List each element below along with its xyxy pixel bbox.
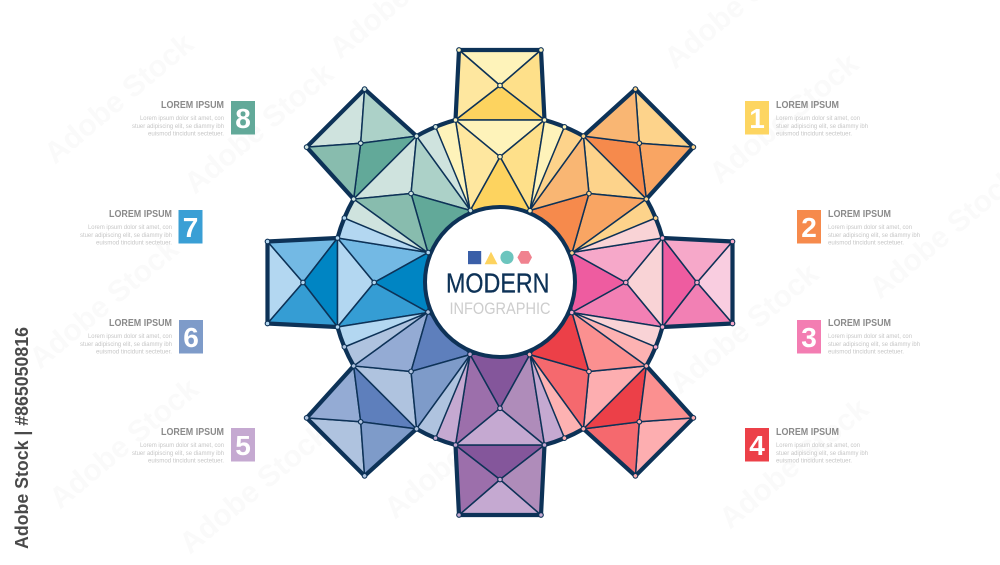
body text 4: euismod tincidunt sectetuer. <box>776 458 852 464</box>
gear outline <box>268 50 732 515</box>
section 3: pink <box>572 218 732 347</box>
section 6 body <box>339 288 495 443</box>
body text 5: euismod tincidunt sectetuer. <box>148 458 224 464</box>
number badge 7: 7 <box>183 212 198 243</box>
number badge 8: 8 <box>235 103 251 134</box>
heading 3: LOREM IPSUM <box>828 318 891 329</box>
body text 8: Lorem ipsum dolor sit amet, con <box>140 115 224 122</box>
body text 7: euismod tincidunt sectetuer. <box>96 240 172 246</box>
section 7 tooth <box>268 238 338 327</box>
item 5 <box>132 427 255 464</box>
number badge 1: 1 <box>749 103 765 134</box>
body text 4: Lorem ipsum dolor sit amet, con <box>776 442 860 449</box>
section 8 body <box>339 122 495 277</box>
section 1: yellow <box>436 50 564 211</box>
body text 1: Lorem ipsum dolor sit amet, con <box>776 115 860 122</box>
body text 7: Lorem ipsum dolor sit amet, con <box>88 224 172 231</box>
center subtitle: INFOGRAPHIC <box>450 299 550 318</box>
node dots <box>265 48 735 517</box>
section 4 body <box>505 288 661 443</box>
body text 6 <box>80 333 172 356</box>
heading 5: LOREM IPSUM <box>161 427 224 438</box>
body text 5 <box>132 442 224 464</box>
number badge 2: 2 <box>801 212 817 243</box>
body text 2: stuer adipiscing elit, se diammy ibh <box>828 232 920 239</box>
item 8 <box>132 100 255 138</box>
item 6 <box>80 318 203 356</box>
number badge 6: 6 <box>183 322 199 353</box>
body text 3: Lorem ipsum dolor sit amet, con <box>828 333 912 340</box>
body text 8: euismod tincidunt sectetuer. <box>148 130 224 138</box>
center title: MODERN <box>446 267 550 298</box>
section 2 body <box>505 122 661 277</box>
section 5 body <box>436 354 564 445</box>
watermark pattern: Adobe Stock <box>173 417 335 560</box>
section 6: slate blue <box>290 288 495 493</box>
stock credit: Adobe Stock | #865050816 <box>12 327 32 549</box>
heading 2: LOREM IPSUM <box>828 209 891 220</box>
body text 8 <box>132 115 224 138</box>
item 2 <box>797 209 920 246</box>
section 1 body <box>436 120 564 211</box>
body text 1 <box>776 115 868 138</box>
body text 4: stuer adipiscing elit, se diammy ibh <box>776 450 868 457</box>
body text 6: stuer adipiscing elit, se diammy ibh <box>80 341 172 348</box>
body text 5: stuer adipiscing elit, se diammy ibh <box>132 450 224 457</box>
icon: square <box>468 251 481 264</box>
body text 2: euismod tincidunt sectetuer. <box>828 240 904 246</box>
section 8: green <box>290 72 495 277</box>
item 3 <box>797 318 920 356</box>
section 4: red <box>505 288 710 493</box>
center circle <box>425 207 575 357</box>
item 7 <box>80 209 202 246</box>
body text 2: Lorem ipsum dolor sit amet, con <box>828 224 912 231</box>
body text 3 <box>828 333 920 356</box>
number badge 4: 4 <box>749 430 765 461</box>
watermark pattern: Adobe Stock <box>38 27 200 170</box>
heading 4: LOREM IPSUM <box>776 427 839 438</box>
watermark pattern: Adobe Stock <box>43 372 205 515</box>
heading 8: LOREM IPSUM <box>161 100 224 111</box>
icon: hexagon <box>517 251 532 264</box>
section 2 tooth <box>583 87 696 199</box>
body text 4 <box>776 442 868 464</box>
body text 6: euismod tincidunt sectetuer. <box>96 348 172 356</box>
watermark pattern: Adobe Stock <box>703 47 865 190</box>
body text 3: euismod tincidunt sectetuer. <box>828 348 904 356</box>
body text 2 <box>828 224 920 246</box>
watermark pattern: Adobe Stock <box>23 232 185 375</box>
watermark pattern: Adobe Stock <box>713 392 875 535</box>
watermark pattern: Adobe Stock <box>378 382 540 525</box>
body text 3: stuer adipiscing elit, se diammy ibh <box>828 341 920 348</box>
icon: circle <box>500 251 514 264</box>
heading 6: LOREM IPSUM <box>109 318 172 329</box>
section 7: sky blue <box>268 218 428 347</box>
section 2: orange <box>505 72 710 277</box>
watermark pattern: Adobe Stock <box>663 257 825 400</box>
body text 7 <box>80 224 172 246</box>
body text 1: euismod tincidunt sectetuer. <box>776 130 852 138</box>
section 3 tooth <box>662 238 732 327</box>
body text 5: Lorem ipsum dolor sit amet, con <box>140 442 224 449</box>
section 5: purple <box>436 354 564 515</box>
number badge 5: 5 <box>235 430 251 461</box>
center icons <box>468 251 532 264</box>
body text 7: stuer adipiscing elit, se diammy ibh <box>80 232 172 239</box>
section 4 tooth <box>583 366 696 478</box>
section 7 body <box>338 218 428 347</box>
body text 6: Lorem ipsum dolor sit amet, con <box>88 333 172 340</box>
heading 7: LOREM IPSUM <box>109 209 172 220</box>
item 4 <box>745 427 868 464</box>
item 1 <box>745 100 868 138</box>
icon: triangle <box>485 252 498 264</box>
body text 8: stuer adipiscing elit, se diammy ibh <box>132 123 224 130</box>
watermark pattern: Adobe Stock <box>178 57 340 200</box>
section 5 tooth <box>456 445 544 515</box>
section 1 tooth <box>456 50 544 120</box>
section 8 tooth <box>304 87 417 199</box>
body text 1: stuer adipiscing elit, se diammy ibh <box>776 123 868 130</box>
section 3 body <box>572 218 662 347</box>
section 6 tooth <box>304 366 417 478</box>
heading 1: LOREM IPSUM <box>776 100 839 111</box>
number badge 3: 3 <box>801 322 817 353</box>
